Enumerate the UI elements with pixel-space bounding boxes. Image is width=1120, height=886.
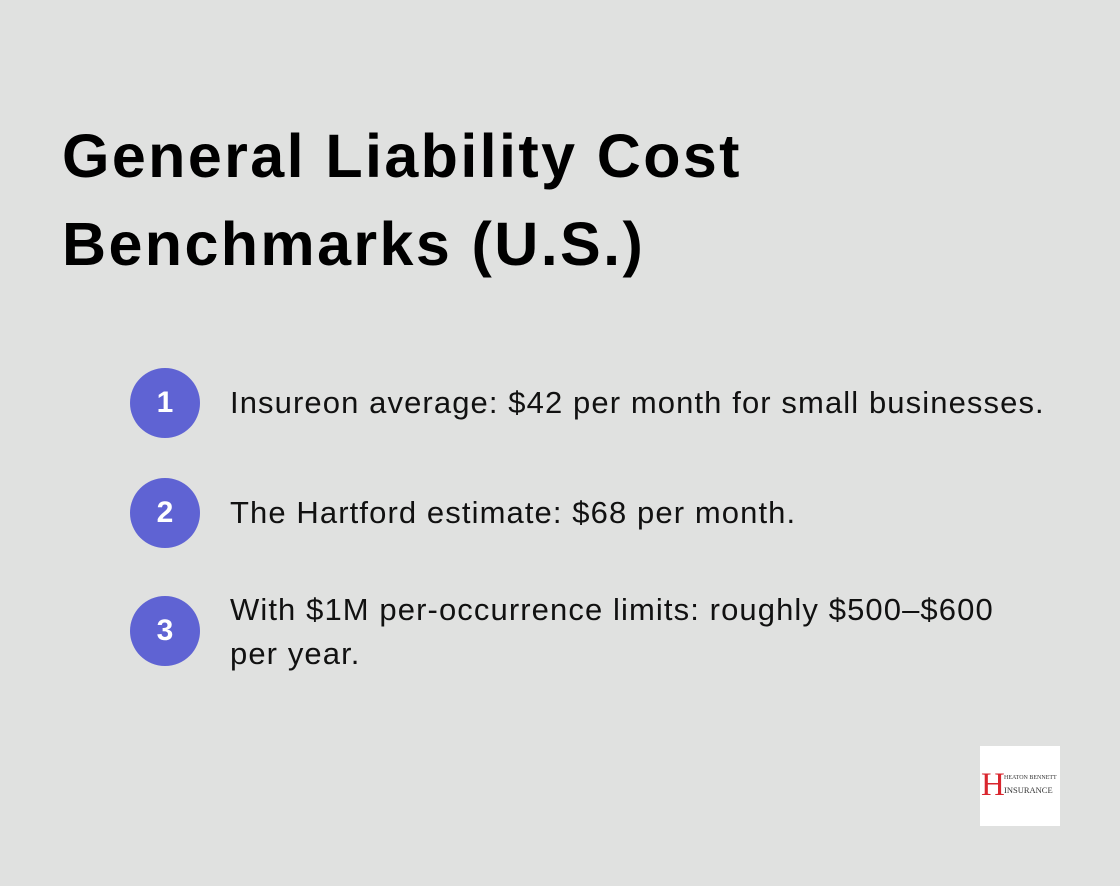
icon: number 2: 2 [157, 496, 173, 529]
icon: number 3 [130, 596, 200, 666]
item 3 [130, 592, 994, 671]
title: General Liability Cost [62, 122, 742, 190]
logo: INSURANCE [1004, 785, 1053, 795]
item 1 [130, 368, 1045, 438]
title [62, 122, 742, 278]
item 2 [130, 478, 796, 548]
icon: number 1: 1 [157, 386, 173, 419]
text 2: The Hartford estimate: $68 per month. [230, 495, 796, 530]
logo: HEATON BENNETT [1004, 775, 1057, 781]
logo [980, 746, 1060, 826]
text 3: With $1M per-occurrence limits: roughly $500–$600 [230, 592, 994, 627]
text 3: per year. [230, 636, 361, 671]
title: Benchmarks (U.S.) [62, 210, 645, 278]
text 3 [230, 592, 994, 671]
icon: number 1 [130, 368, 200, 438]
text 1: Insureon average: $42 per month for small businesses. [230, 385, 1045, 420]
icon: number 3: 3 [157, 614, 173, 647]
icon: number 2 [130, 478, 200, 548]
logo: H [981, 767, 1005, 803]
